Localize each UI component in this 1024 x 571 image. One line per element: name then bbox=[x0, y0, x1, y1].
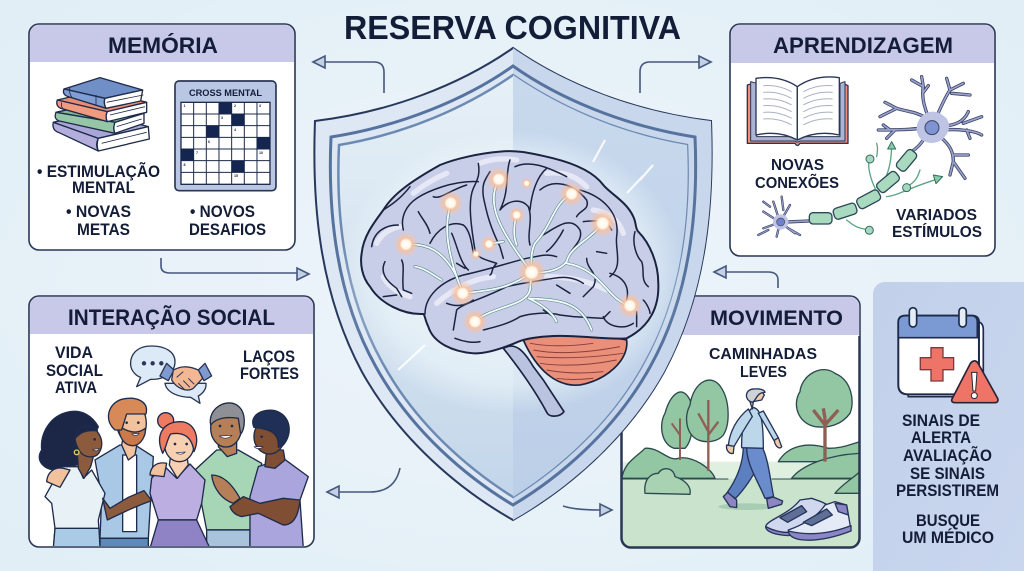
alert text bbox=[896, 412, 999, 547]
title: RESERVA COGNITIVA bbox=[344, 9, 681, 46]
crossword clue numbers: 6 bbox=[208, 140, 210, 144]
memory bullets: MENTAL bbox=[72, 179, 135, 197]
panel: sinais de alerta bbox=[873, 282, 1024, 571]
learning text: NOVAS bbox=[771, 157, 824, 174]
icon: speech bubbles and handshake bbox=[131, 346, 212, 403]
bushes bbox=[622, 442, 860, 494]
person: man in green shirt bbox=[195, 403, 262, 548]
heading: interação social: INTERAÇÃO SOCIAL bbox=[68, 305, 275, 330]
memory bullets: • ESTIMULAÇÃO bbox=[37, 161, 160, 181]
alert text: SINAIS DE bbox=[902, 412, 980, 430]
alert text: BUSQUE bbox=[916, 512, 980, 530]
social text: LAÇOS bbox=[243, 348, 295, 366]
crossword clue numbers: 10 bbox=[259, 151, 263, 155]
social text bbox=[46, 344, 299, 397]
memory bullets: • NOVAS bbox=[66, 203, 131, 221]
social text: FORTES bbox=[240, 365, 299, 383]
heading: aprendizagem: APRENDIZAGEM bbox=[773, 33, 953, 58]
illustration: group of five friends bbox=[39, 398, 308, 548]
illustration: park with walker and shoes bbox=[620, 370, 860, 547]
person: bearded man bbox=[95, 398, 153, 548]
brain bbox=[361, 151, 658, 416]
arrow: shield to memória bbox=[313, 56, 384, 93]
arrow: aprendizagem to shield bbox=[714, 266, 778, 288]
icon: calendar with medical cross and warning bbox=[898, 308, 998, 403]
icon: neurons bbox=[758, 77, 982, 237]
icon: stack of books bbox=[53, 78, 149, 151]
heading: memória: MEMÓRIA bbox=[108, 33, 218, 58]
walking text: CAMINHADAS bbox=[709, 346, 817, 363]
memory bullets bbox=[37, 161, 266, 239]
cerebrum outline bbox=[361, 151, 658, 353]
icon: crossword bbox=[175, 81, 276, 191]
highlights bbox=[377, 159, 623, 303]
memory bullets: DESAFIOS bbox=[189, 221, 266, 239]
arrow: shield to interação social bbox=[327, 468, 400, 498]
alert text: SE SINAIS bbox=[910, 465, 985, 483]
trees bbox=[662, 370, 852, 471]
alert text: UM MÉDICO bbox=[902, 528, 994, 547]
crossword clue numbers: 1 bbox=[184, 104, 186, 108]
crossword title: CROSS MENTAL bbox=[189, 87, 262, 98]
social text: SOCIAL bbox=[46, 362, 103, 380]
person: man in purple shirt bbox=[230, 410, 308, 548]
crossword clue numbers: 15 bbox=[234, 174, 238, 178]
arrow: shield to movimento bbox=[563, 504, 612, 516]
crossword clue numbers bbox=[184, 104, 263, 178]
cerebellum bbox=[523, 336, 627, 385]
shoes bbox=[766, 498, 851, 540]
social text: VIDA bbox=[55, 344, 93, 362]
crossword clue numbers: 2 bbox=[234, 104, 236, 108]
alert text: AVALIAÇÃO bbox=[903, 445, 992, 465]
learning text bbox=[755, 157, 982, 241]
memory bullets: • NOVOS bbox=[190, 203, 255, 221]
shield bbox=[314, 48, 712, 520]
ground bbox=[620, 462, 860, 547]
sulci bbox=[372, 160, 650, 342]
panel: interação social bbox=[29, 296, 314, 548]
panel: movimento bbox=[620, 296, 860, 548]
crossword clue numbers: 3 bbox=[259, 104, 261, 108]
icon: open book bbox=[747, 77, 848, 145]
alert text: ALERTA bbox=[911, 429, 971, 447]
learning text: VARIADOS bbox=[896, 207, 977, 224]
walker bbox=[718, 389, 783, 510]
crossword clue numbers: 7 bbox=[196, 151, 198, 155]
crossword clue numbers: 4 bbox=[234, 128, 236, 132]
learning text: CONEXÕES bbox=[755, 172, 839, 192]
heading: movimento: MOVIMENTO bbox=[710, 306, 843, 330]
memory bullets: METAS bbox=[77, 221, 130, 239]
panel: aprendizagem bbox=[730, 24, 995, 256]
brain stem bbox=[503, 346, 564, 416]
glowing synapses bbox=[393, 167, 643, 334]
arrow: shield to aprendizagem bbox=[640, 56, 711, 93]
arrow: memória to shield bbox=[161, 258, 309, 280]
nerve pathways bbox=[406, 179, 630, 330]
crossword clue numbers: 8 bbox=[184, 163, 186, 167]
panel: memória bbox=[29, 24, 295, 250]
walking text: LEVES bbox=[740, 364, 787, 381]
person: woman with red hair bbox=[150, 413, 210, 548]
walking text bbox=[709, 346, 817, 381]
learning text: ESTÍMULOS bbox=[892, 222, 982, 241]
person: woman with curly hair bbox=[39, 411, 152, 548]
social text: ATIVA bbox=[55, 379, 97, 397]
alert text: PERSISTIREM bbox=[896, 482, 999, 500]
crossword clue numbers: 3 bbox=[221, 116, 223, 120]
